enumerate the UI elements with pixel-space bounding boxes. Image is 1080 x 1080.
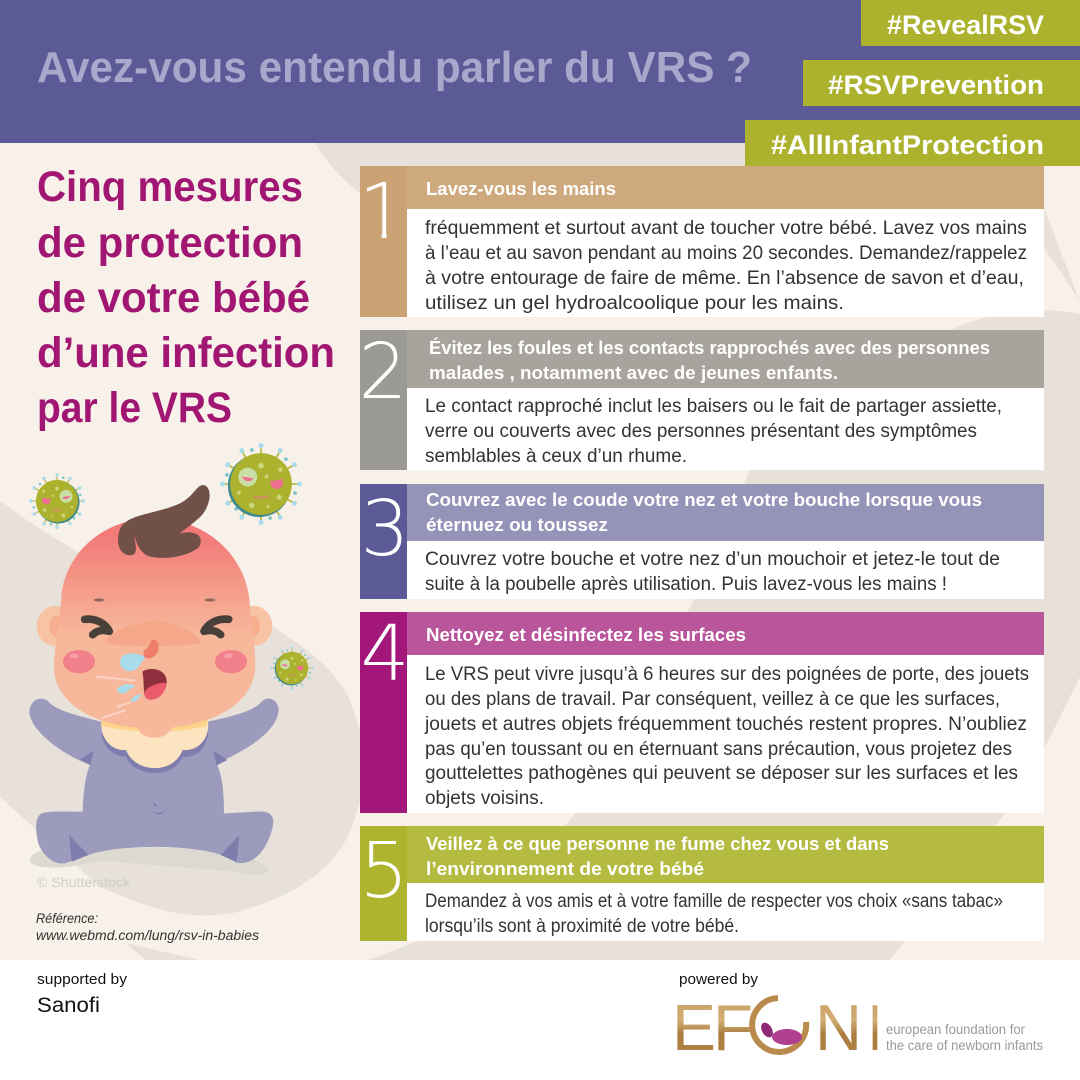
foot of numeral 1 masked left (360, 232, 382, 240)
heading 3 (426, 489, 982, 535)
heading 1: Lavez-vous les mains (426, 178, 616, 199)
body 4 (424, 664, 1029, 809)
body 2: verre ou couverts avec des personnes présentant des symptômes (425, 421, 977, 442)
virus: small right (271, 647, 313, 689)
left heading: d’une infection (37, 329, 335, 377)
heading 2: Évitez les foules et les contacts rapprochés avec des personnes (429, 337, 990, 358)
panel: step 4 (360, 610, 1044, 813)
clothing folds (69, 751, 239, 862)
foot of numeral 1 masked right (386, 232, 407, 240)
reference: Référence: (36, 911, 98, 926)
body 5 (425, 891, 1003, 937)
heading 5: Veillez à ce que personne ne fume chez vous et dans (426, 833, 889, 854)
left heading: par le VRS (37, 384, 232, 432)
collar shadow (101, 730, 208, 773)
body 2: semblables à ceux d’un rhume. (425, 446, 687, 467)
hashtag: AllInfantProtection (745, 120, 1080, 166)
body 3: suite à la poubelle après utilisation. Puis lavez-vous les mains ! (425, 574, 947, 595)
bib (101, 722, 208, 768)
virus: top right (220, 443, 302, 525)
number 5: 5 (360, 827, 408, 916)
heading 2: malades , notamment avec de jeunes enfants. (429, 362, 838, 383)
logo: EFCNI: E (672, 991, 716, 1064)
supported by: supported by (37, 971, 128, 988)
footer background (0, 960, 1080, 1080)
body 5: Demandez à vos amis et à votre famille de respecter vos choix «sans tabac» (425, 891, 1003, 912)
body 1: à l’eau et au savon pendant au moins 20 secondes. Demandez/rappelez (425, 243, 1027, 264)
background shape: right blob (368, 310, 1080, 960)
body 4: jouets et autres objets fréquemment touchés restent propres. N’oubliez (424, 714, 1027, 735)
hair (118, 485, 210, 558)
body 4: ou des plans de travail. Par conséquent, veillez à ce que les surfaces, (425, 689, 1000, 710)
eyebrows (94, 598, 215, 602)
nose band (105, 621, 201, 646)
heading 3: éternuez ou toussez (426, 514, 608, 535)
hashtag: AllInfantProtection: #AllInfantProtection (771, 130, 1044, 160)
hashtag: RSVPrevention: #RSVPrevention (828, 70, 1044, 100)
body 4: pas qu’en toussant ou en éternuant sans précaution, vous projetez des (425, 739, 1012, 760)
powered by: powered by (679, 971, 758, 988)
body 5: lorsqu’ils sont à proximité de votre bébé. (425, 916, 739, 937)
logo: EFCNI: N (815, 991, 862, 1064)
virus: top left (29, 473, 85, 529)
droplets (117, 653, 145, 702)
panel: step 1 (358, 166, 1044, 317)
hashtag: RevealRSV: #RevealRSV (887, 10, 1044, 40)
body 3 (425, 549, 1000, 595)
logo: EFCNI: F (713, 991, 753, 1064)
baby body (29, 699, 279, 864)
number 3: 3 (360, 485, 410, 574)
panel: step 3 (360, 484, 1044, 599)
background shape: bottom sliver (125, 943, 200, 960)
head (54, 518, 255, 728)
hashtag: RevealRSV (861, 0, 1080, 46)
cough lines (96, 677, 135, 718)
left heading: Cinq mesures (37, 163, 303, 211)
logo tagline: the care of newborn infants (886, 1038, 1043, 1053)
header band (0, 0, 1080, 143)
left heading: de protection (37, 219, 303, 267)
body 4: Le VRS peut vivre jusqu’à 6 heures sur des poignées de porte, des jouets (425, 664, 1029, 685)
sponsor: Sanofi: Sanofi (37, 994, 100, 1017)
neck (137, 723, 173, 738)
background shape: top blob (315, 143, 745, 230)
mouth (142, 669, 167, 700)
right ear (236, 606, 272, 646)
number 4: 4 (360, 610, 410, 699)
left ear (37, 606, 73, 646)
nose (143, 640, 159, 658)
heading 5 (426, 833, 889, 879)
logo tagline (886, 1022, 1043, 1053)
closed eyes (85, 619, 229, 635)
body 3: Couvrez votre bouche et votre nez d’un mouchoir et jetez-le tout de (425, 549, 1000, 570)
logo tagline: european foundation for (886, 1022, 1025, 1037)
body 1: utilisez un gel hydroalcoolique pour les mains. (425, 293, 844, 314)
number 1: 1 (358, 168, 408, 257)
main title: Avez-vous entendu parler du VRS ? (37, 43, 752, 92)
body 2 (425, 396, 1002, 467)
bib trim (101, 719, 208, 731)
heading 4: Nettoyez et désinfectez les surfaces (426, 624, 746, 645)
hashtag: RSVPrevention (803, 60, 1080, 106)
background shape: left blob (0, 500, 360, 915)
logo: EFCNI: I (868, 991, 882, 1064)
panel: step 2 (358, 328, 1044, 470)
image credit: © Shutterstock (37, 875, 130, 890)
left heading (37, 163, 335, 432)
body 4: gouttelettes pathogènes qui peuvent se déposer sur les surfaces et les (425, 763, 1018, 784)
body 1: à votre entourage de faire de même. En l’absence de savon et d’eau, (425, 268, 1024, 289)
body 1 (425, 218, 1027, 314)
body 1: fréquemment et surtout avant de toucher votre bébé. Lavez vos mains (425, 218, 1027, 239)
heading 2 (429, 337, 990, 383)
number 2: 2 (358, 328, 408, 417)
background shape: right sliver (1044, 208, 1080, 302)
reference (36, 911, 259, 943)
shadow under baby (29, 846, 269, 875)
heading 5: l’environnement de votre bébé (426, 858, 704, 879)
heading 3: Couvrez avec le coude votre nez et votre bouche lorsque vous (426, 489, 982, 510)
cheeks (63, 650, 247, 673)
panel: step 5 (360, 826, 1044, 941)
reference: www.webmd.com/lung/rsv-in-babies (36, 928, 259, 943)
body 2: Le contact rapproché inclut les baisers ou le fait de partager assiette, (425, 396, 1002, 417)
logo: EFCNI (672, 991, 882, 1064)
illustration: sick baby (29, 485, 279, 875)
body 4: objets voisins. (425, 788, 544, 809)
left heading: de votre bébé (37, 274, 310, 322)
